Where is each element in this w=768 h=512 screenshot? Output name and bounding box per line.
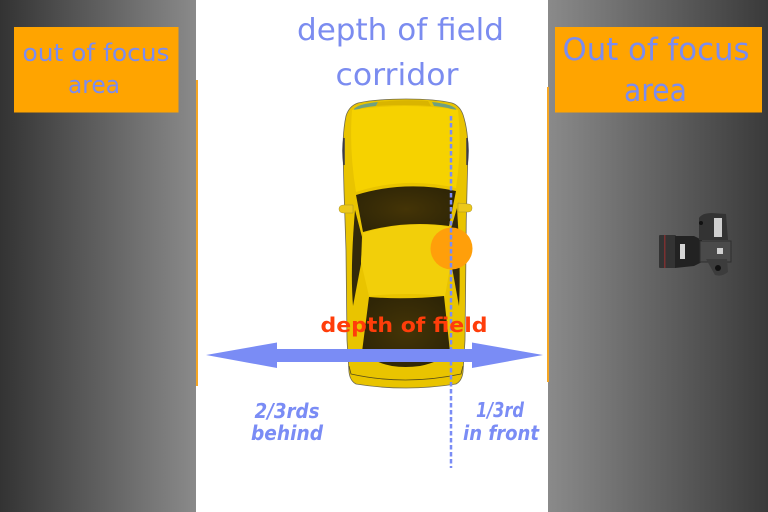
label: 2/3rds behind: [251, 399, 324, 445]
windshield washers strip: [354, 102, 456, 111]
roof: [361, 225, 451, 296]
side window left: [352, 210, 362, 306]
lens mount: [675, 236, 702, 268]
side mirrors: [339, 203, 472, 213]
rear window: [362, 296, 450, 367]
title: depth of field corridor: depth of field: [297, 13, 504, 48]
callout: right out of focus area: [555, 27, 762, 112]
callout: left out of focus area: out of focus: [22, 39, 170, 67]
title: depth of field corridor: [297, 13, 504, 93]
body: [700, 241, 731, 262]
hood: [351, 106, 460, 192]
side window right: [450, 208, 460, 306]
corridor left edge line: [196, 80, 198, 386]
label: 2/3rds behind: 2/3rds: [254, 399, 320, 423]
top plate: [699, 213, 728, 240]
callout: right out of focus area: area: [624, 73, 687, 109]
label: 1/3rd in front: in front: [463, 421, 540, 445]
dark side vents on hood edges: [343, 138, 468, 165]
grip: [706, 259, 728, 276]
callout: left out of focus area: [14, 27, 178, 112]
focal plane dashed line: [450, 116, 452, 468]
callout: left out of focus area: area: [68, 71, 120, 99]
depth of field arrow: [206, 342, 543, 368]
label: 2/3rds behind: behind: [251, 421, 324, 445]
title: depth of field corridor: corridor: [336, 58, 459, 93]
callout: right out of focus area: Out of focus: [562, 32, 750, 68]
icon: camera from above: [659, 213, 731, 276]
car body: [343, 99, 468, 388]
windshield: [356, 186, 456, 232]
lens barrel: [659, 235, 676, 268]
corridor right edge line: [547, 87, 549, 382]
label: depth of field: depth of field: [320, 313, 488, 337]
focus point marker: [430, 228, 472, 270]
panel: left out of focus background: [0, 0, 196, 512]
trunk line: [349, 366, 463, 380]
panel: right out of focus background: [548, 0, 768, 512]
label: 1/3rd in front: [463, 398, 540, 445]
label: 1/3rd in front: 1/3rd: [476, 398, 525, 422]
icon: yellow car from above: [339, 99, 472, 388]
